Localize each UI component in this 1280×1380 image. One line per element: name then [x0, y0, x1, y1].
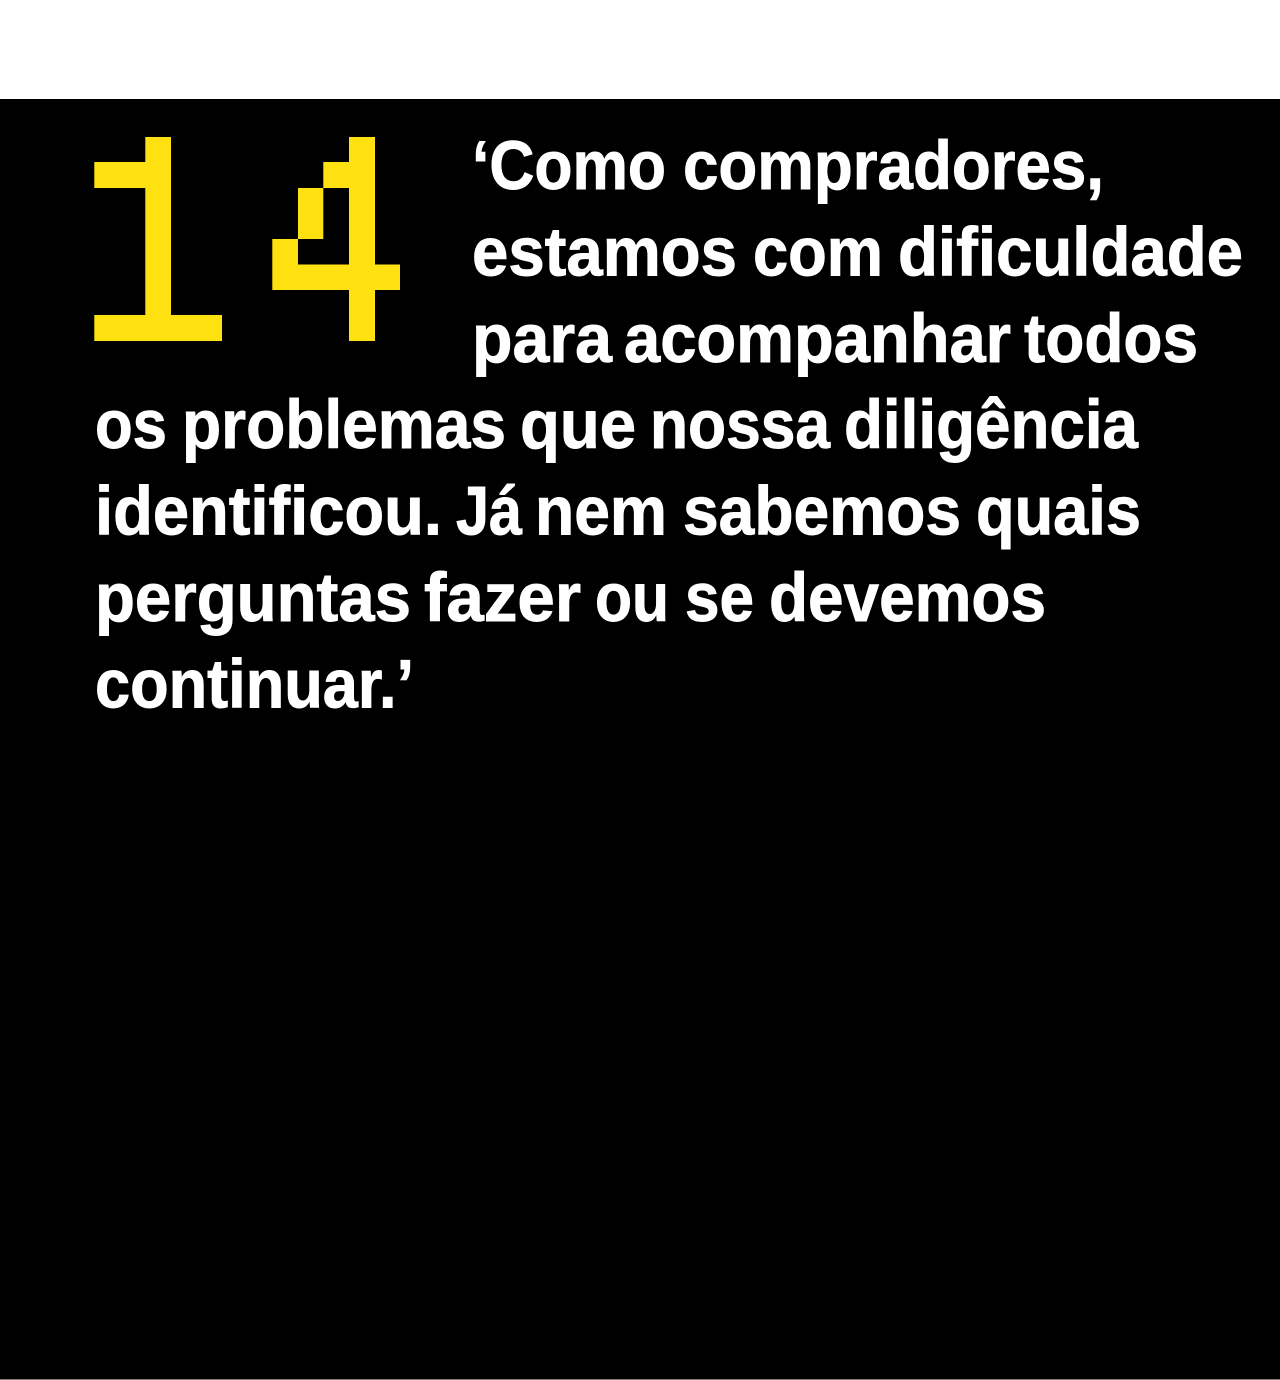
quote text: todos: [1024, 300, 1198, 377]
quote text: fazer: [424, 559, 581, 636]
quote text: nem: [535, 473, 667, 550]
quote text: compradores,: [683, 127, 1104, 204]
quote text: que: [520, 386, 636, 463]
quote text: perguntas: [95, 559, 411, 636]
quote text: problemas: [182, 386, 506, 463]
quote text: diligência: [844, 386, 1139, 463]
quote text: acompanhar: [624, 300, 1011, 377]
quote text: quais: [976, 473, 1141, 550]
quote text: Já: [456, 473, 523, 550]
quote text: sabemos: [683, 473, 961, 550]
quote text: continuar.’: [95, 645, 414, 722]
digit 4: [272, 137, 400, 341]
quote text: nossa: [650, 386, 831, 463]
quote text: ou: [595, 559, 669, 636]
quote text: estamos: [472, 213, 737, 290]
pixel number 14: [94, 137, 400, 341]
quote text: dificuldade: [898, 213, 1243, 290]
quote text: se: [685, 559, 754, 636]
quote text: os: [95, 386, 167, 463]
quote text: ‘Como: [472, 127, 666, 204]
quote text: para: [472, 300, 613, 377]
quote text: identificou.: [95, 473, 442, 550]
quote text: com: [753, 213, 883, 290]
quote text: devemos: [769, 559, 1046, 636]
digit 1: [94, 137, 222, 341]
quote text: [95, 127, 1243, 722]
